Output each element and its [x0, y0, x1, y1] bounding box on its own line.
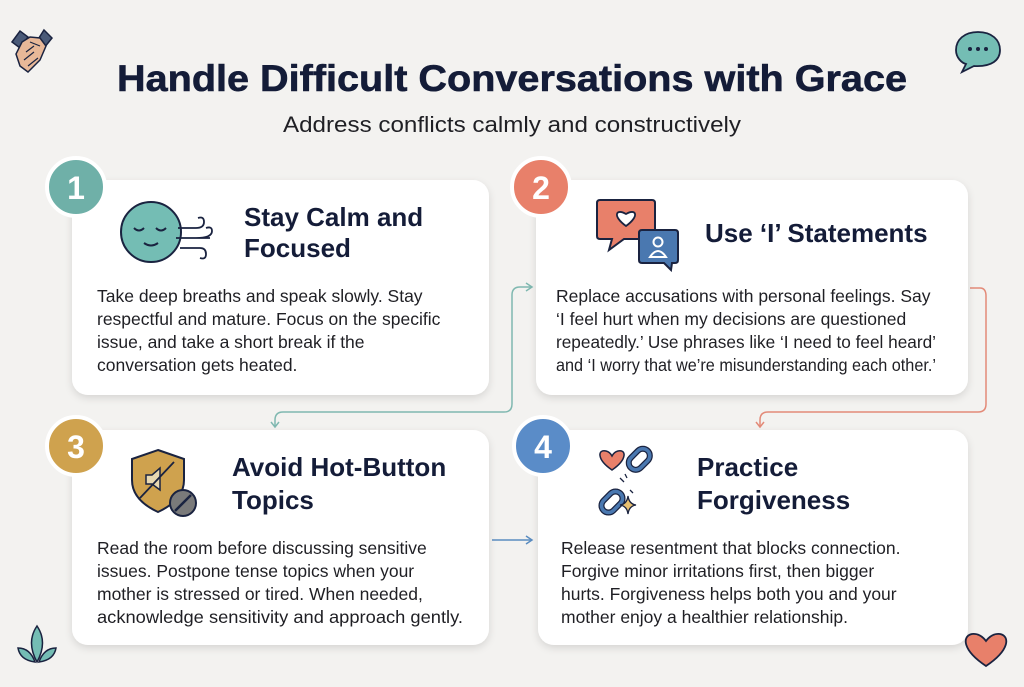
body text: Release resentment that blocks connection. — [561, 538, 900, 558]
icon: shield with mute — [132, 450, 196, 516]
body text: mother enjoy a healthier relationship. — [561, 607, 848, 627]
heading: Use ‘I’ Statements — [705, 218, 928, 248]
body text: Forgive minor irritations first, then bigger — [561, 561, 874, 581]
body text: and ‘I worry that we’re misunderstanding each other.’ — [556, 355, 936, 375]
heading: Focused — [244, 233, 351, 263]
heading: Practice — [697, 452, 798, 482]
badge 2 — [512, 158, 570, 216]
badge 3: 3 — [67, 429, 85, 465]
body text: ‘I feel hurt when my decisions are questioned — [556, 309, 906, 329]
title: Handle Difficult Conversations with Grace — [117, 58, 907, 99]
body text: conversation gets heated. — [97, 355, 297, 375]
arrow: teal connector 2 to 3 — [271, 283, 532, 427]
body text: mother is stressed or tired. When needed, — [97, 584, 423, 604]
panel 4: forgiveness — [538, 430, 968, 645]
icon: chat bubbles — [597, 200, 678, 270]
body text: repeatedly.’ Use phrases like ‘I need to feel heard’ — [556, 332, 936, 352]
panel 2: I statements — [536, 180, 968, 395]
badge 2: 2 — [532, 170, 550, 206]
panel 3: hot button — [72, 430, 489, 645]
body text: hurts. Forgiveness helps both you and your — [561, 584, 897, 604]
body text: issue, and take a short break if the — [97, 332, 365, 352]
subtitle: Address conflicts calmly and constructively — [283, 112, 741, 137]
icon: broken chain with heart — [599, 446, 653, 515]
body text: Take deep breaths and speak slowly. Stay — [97, 286, 423, 306]
badge 4: 4 — [534, 429, 552, 465]
body text: Replace accusations with personal feelings. Say — [556, 286, 931, 306]
heading: Topics — [232, 485, 314, 515]
badge 3 — [47, 417, 105, 475]
heading: Stay Calm and — [244, 202, 423, 232]
body text: respectful and mature. Focus on the specific — [97, 309, 441, 329]
badge 1 — [47, 158, 105, 216]
body text: Read the room before discussing sensitive — [97, 538, 427, 558]
arrow: orange connector 2 to 4 — [756, 288, 986, 427]
arrow: blue 3 to 4 — [492, 536, 532, 544]
badge 1: 1 — [67, 170, 85, 206]
body text: acknowledge sensitivity and approach gently. — [97, 607, 463, 627]
heading: Forgiveness — [697, 485, 850, 515]
icon: handshake — [12, 30, 52, 72]
icon: chat bubble top right — [956, 32, 1000, 72]
panel 1: stay calm — [72, 180, 489, 395]
icon: calm face — [121, 202, 212, 262]
heading: Avoid Hot-Button — [232, 452, 446, 482]
badge 4 — [514, 417, 572, 475]
body text: issues. Postpone tense topics when your — [97, 561, 414, 581]
icon: leaves bottom left — [18, 626, 56, 662]
icon: heart bottom right — [966, 634, 1006, 666]
